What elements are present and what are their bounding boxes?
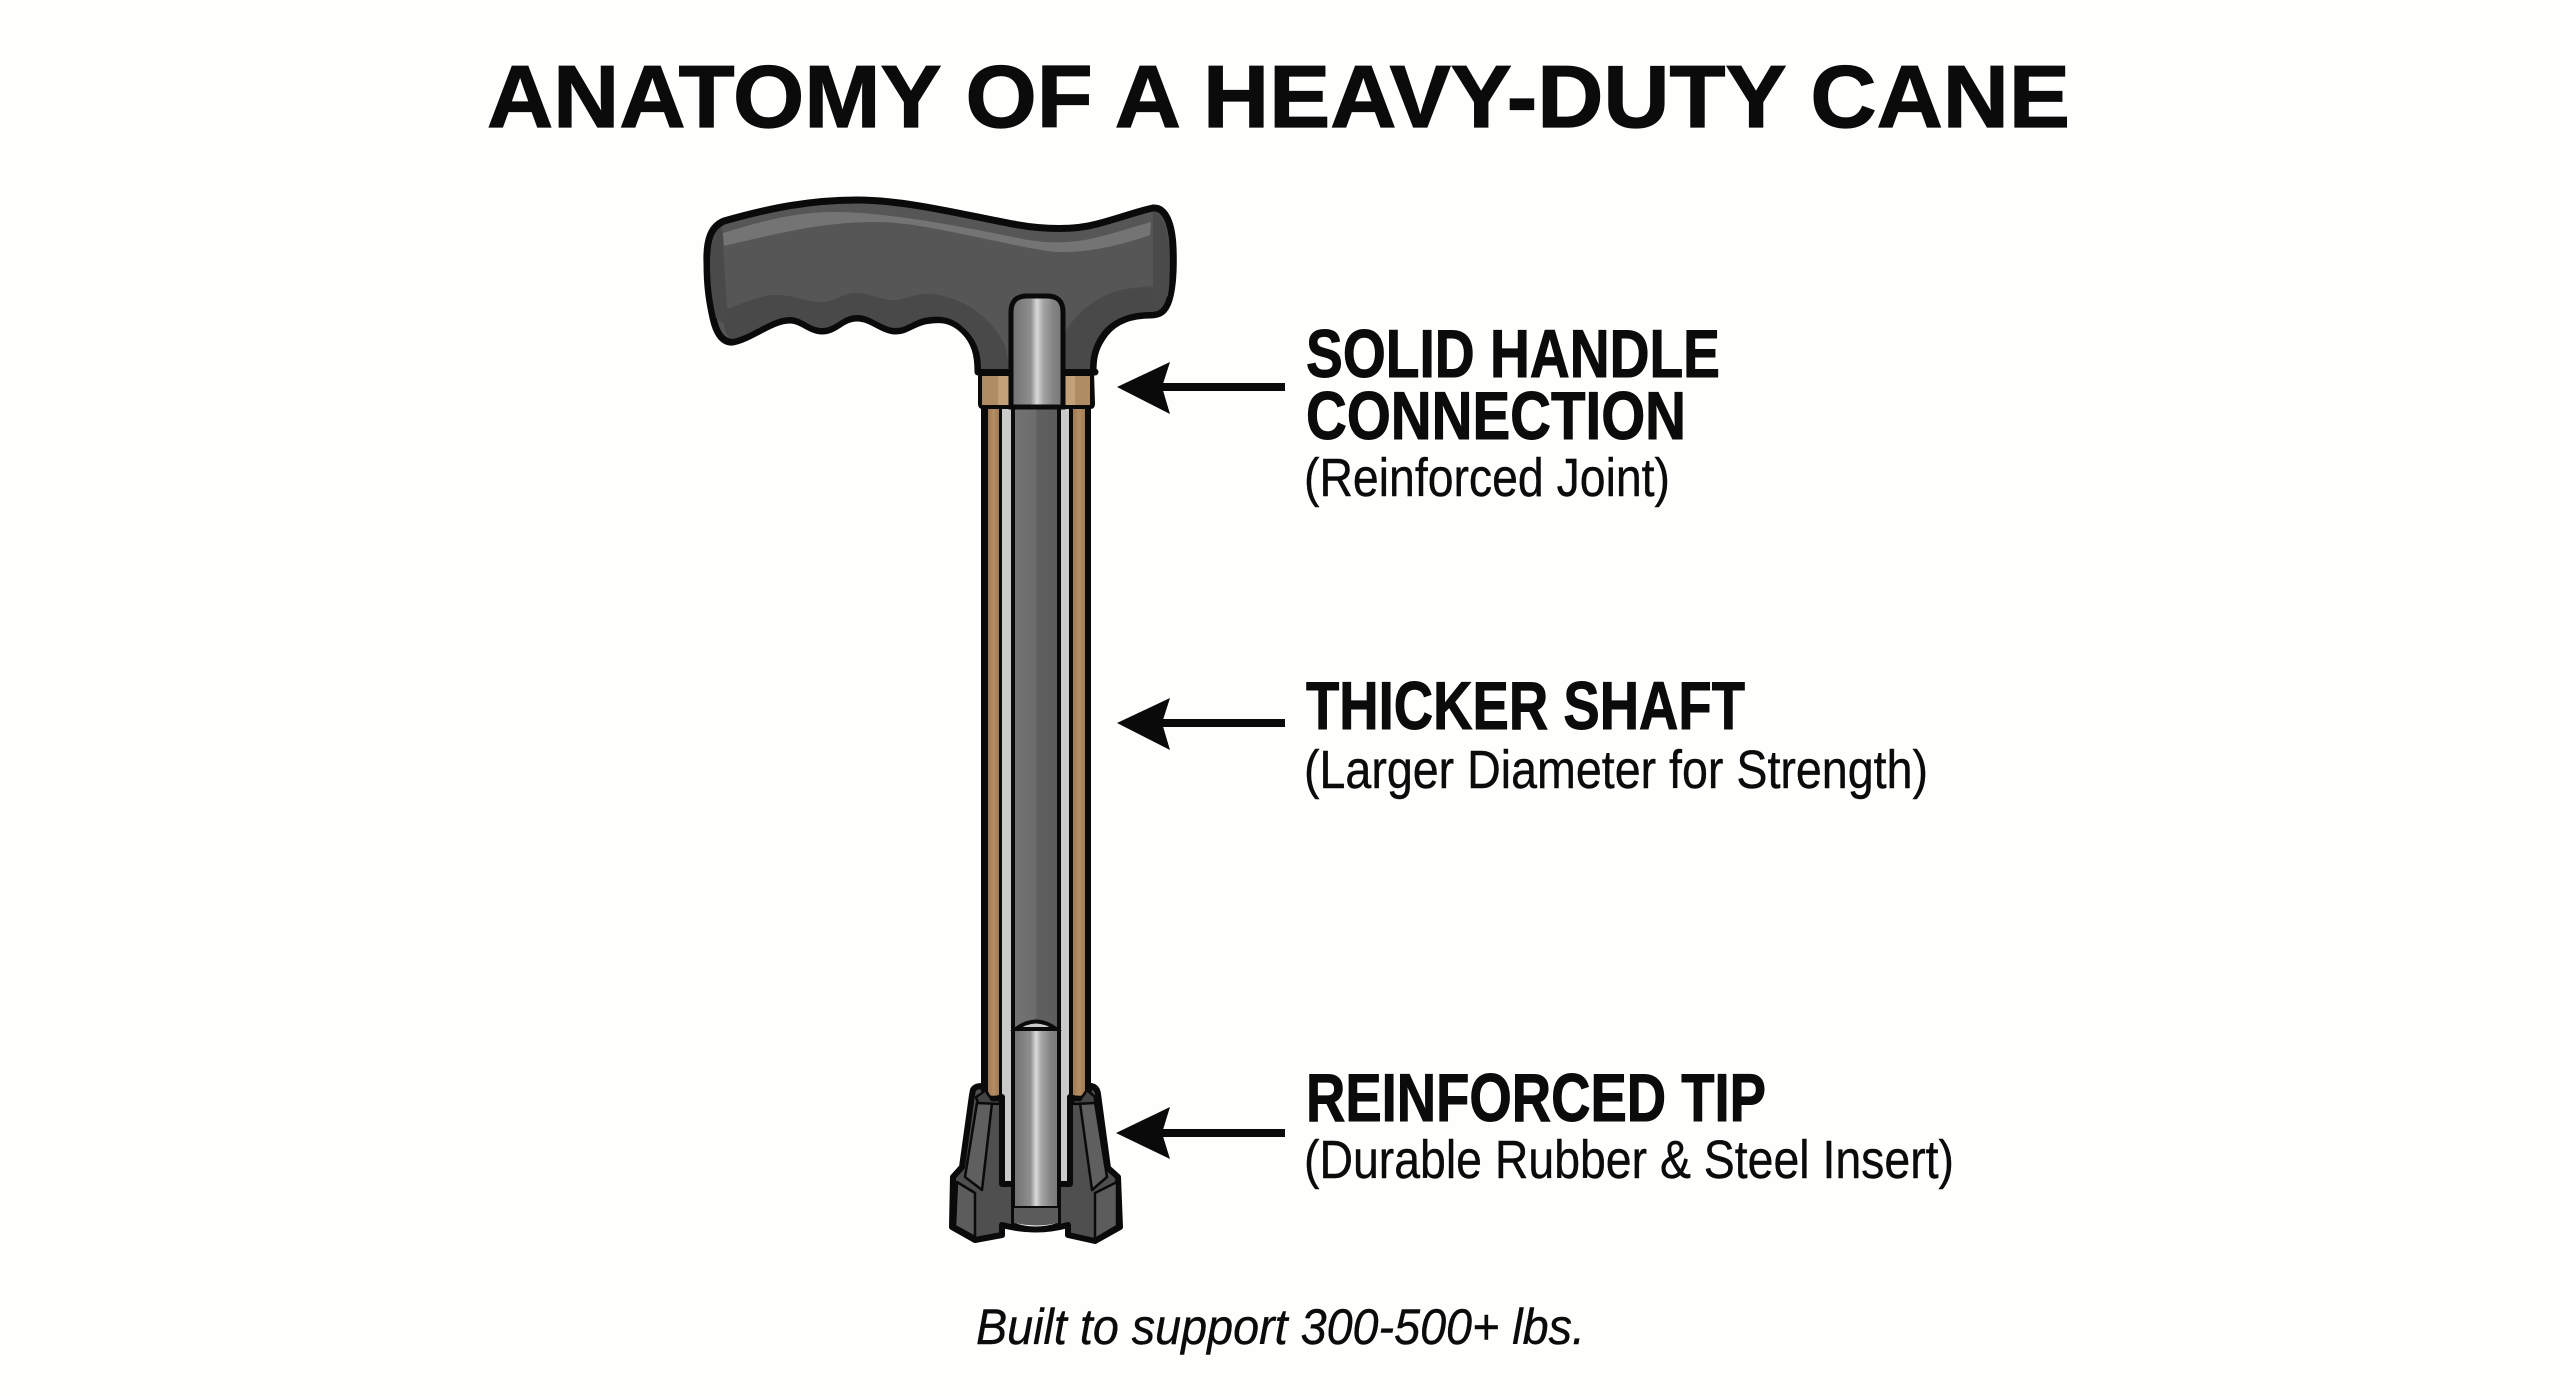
steel pin in handle [1011, 296, 1063, 407]
label: thicker shaft: (Larger Diameter for Strength) [1304, 740, 1928, 800]
steel insert [1013, 1022, 1059, 1226]
label: reinforced tip: REINFORCED TIP [1306, 1060, 1766, 1136]
cane illustration [707, 200, 1173, 1241]
label: reinforced tip [1304, 1060, 1954, 1190]
grip underside shading [723, 293, 1010, 369]
label: solid handle connection [1304, 316, 1720, 508]
title: ANATOMY OF A HEAVY-DUTY CANE [487, 47, 2070, 146]
label: reinforced tip: (Durable Rubber & Steel Insert) [1304, 1130, 1954, 1190]
grip highlight [723, 212, 1151, 252]
arrow: handle connection [1117, 362, 1285, 414]
arrow: reinforced tip [1116, 1107, 1285, 1159]
grip end caps [710, 226, 727, 325]
label: solid handle connection: (Reinforced Joint) [1304, 448, 1670, 508]
shaft [981, 405, 1091, 1209]
footer note: Built to support 300-500+ lbs. [976, 1299, 1585, 1355]
handle connection collar [978, 372, 1095, 409]
label: solid handle connection: SOLID HANDLE [1306, 316, 1720, 392]
rubber tip [952, 1086, 1120, 1241]
handle grip [707, 200, 1173, 372]
label: thicker shaft [1304, 668, 1928, 800]
label: thicker shaft: THICKER SHAFT [1306, 668, 1745, 744]
arrow: thicker shaft [1117, 698, 1285, 750]
label: solid handle connection: CONNECTION [1306, 378, 1686, 454]
